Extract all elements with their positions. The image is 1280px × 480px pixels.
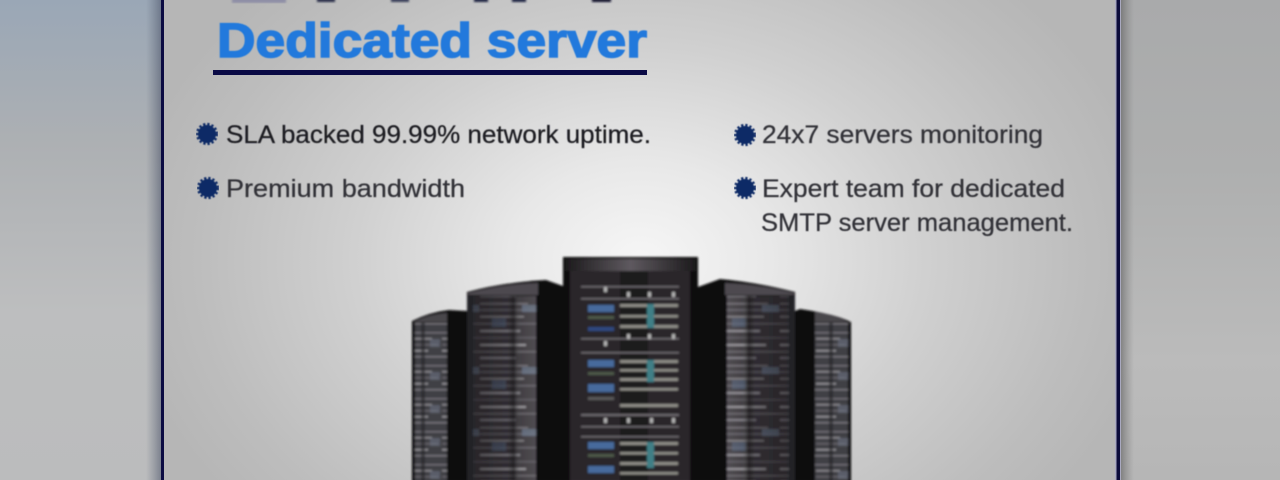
feature text: SLA backed 99.99% network uptime.: [226, 121, 651, 149]
feature: bandwidth: [198, 175, 465, 203]
feature text: Expert team for dedicated: [762, 175, 1065, 203]
heading: Dedicated server: Dedicated server: [217, 15, 647, 68]
icon: bullet: [197, 124, 217, 144]
module row lines: [581, 286, 679, 438]
feature text: 24x7 servers monitoring: [762, 121, 1043, 149]
feature: monitoring: [735, 121, 1043, 149]
rack: inner left: [467, 280, 563, 480]
server racks illustration: [412, 257, 851, 480]
panel shadow: left: [146, 0, 162, 480]
status lights: [604, 287, 675, 423]
heading underline: [213, 70, 647, 75]
icon: bullet: [735, 125, 755, 145]
grey server stripes: [620, 304, 678, 474]
outer background: left: [0, 0, 163, 480]
feature: SLA uptime: [197, 121, 651, 149]
icon: bullet: [735, 178, 755, 198]
rack: inner right: [698, 279, 795, 480]
feature text: [761, 175, 1073, 237]
rack: far left: [412, 310, 467, 480]
panel: main card: [163, 0, 1117, 480]
blue drive blocks: [588, 305, 614, 473]
teal indicators: [647, 304, 654, 468]
rack: far right: [795, 309, 851, 480]
icon: bullet: [198, 178, 218, 198]
outer background: right: [1118, 0, 1280, 480]
feature text: SMTP server management.: [761, 209, 1073, 237]
rack: center: [563, 257, 698, 480]
feature text: Premium bandwidth: [226, 175, 465, 203]
panel shadow: right: [1120, 0, 1134, 480]
panel border: left: [161, 0, 164, 480]
feature: expert team: [735, 175, 1073, 237]
cropped top heading remnants: [232, 0, 611, 3]
panel border: right: [1115, 0, 1121, 480]
